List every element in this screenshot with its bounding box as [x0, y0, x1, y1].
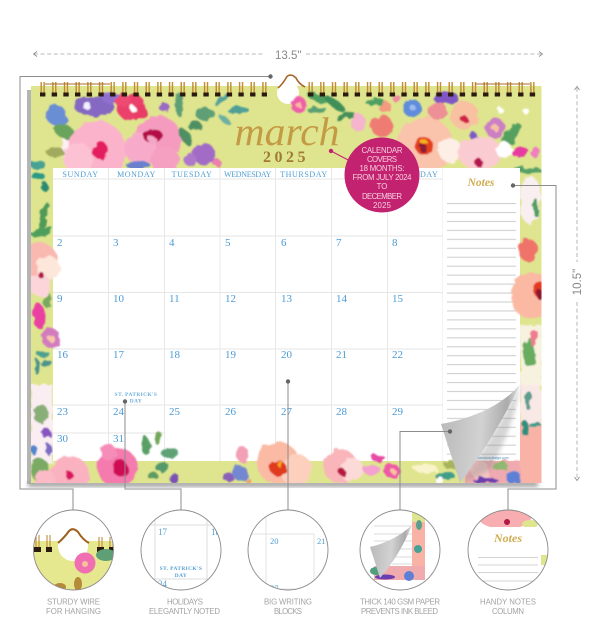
caption: holidays: ELEGANTLY NOTED: [149, 607, 220, 616]
small pink flower by hanger: [291, 97, 307, 113]
day numbers: 24: [113, 406, 124, 418]
height dimension: 10.5 inches: [572, 86, 584, 480]
caption: sturdy wire: FOR HANGING: [46, 607, 101, 616]
caption: writing blocks: [264, 598, 312, 616]
grid: white writing area: [53, 168, 443, 461]
day numbers: 6: [281, 237, 287, 249]
day numbers: 21: [336, 349, 347, 361]
spiral binding right: [308, 82, 537, 97]
spiral binding left: [40, 82, 267, 97]
caption: sturdy wire: STURDY WIRE: [47, 598, 100, 606]
detail circle: writing blocks: [248, 510, 328, 593]
day numbers: 3: [113, 237, 119, 249]
calendar page: [18, 86, 556, 494]
width dimension: 13.5 inches: 13.5": [275, 50, 301, 62]
detail circle: sturdy wire: [33, 510, 116, 591]
width dimension: 13.5 inches: [34, 50, 542, 62]
day numbers: 19: [225, 349, 236, 361]
callout: 18 months coverage: FROM JULY 2024: [352, 173, 412, 182]
day numbers: 25: [169, 406, 180, 418]
caption: holidays: HOLIDAYS: [167, 598, 203, 606]
detail circle: writing blocks: 20: [270, 536, 278, 546]
top-left florals: [30, 92, 249, 191]
grid lines: [53, 168, 443, 461]
day numbers: 30: [57, 433, 68, 445]
notes column: calendarsdesign.com: [475, 456, 509, 460]
page background: [31, 86, 542, 483]
left strip flowers overlapping grid: [31, 242, 62, 349]
calendar outline bracket: [20, 76, 270, 510]
day numbers: 29: [392, 406, 404, 418]
leader: paper: [400, 429, 452, 510]
detail circle: holidays: DAY: [175, 573, 187, 579]
callout: 18 months coverage: [329, 138, 420, 212]
caption: holidays: [149, 598, 220, 616]
hook dot: [268, 74, 273, 79]
weekday headers: MONDAY: [117, 170, 156, 179]
weekday headers: TUESDAY: [172, 170, 212, 179]
height dimension: 10.5 inches: 10.5": [572, 269, 584, 295]
right strip florals: [519, 176, 542, 436]
left strip lower florals: [30, 201, 54, 482]
holiday note: ST. PATRICK'S: [115, 392, 157, 398]
day numbers: 9: [57, 293, 63, 305]
day numbers: 26: [225, 406, 236, 418]
notes column: Notes: [467, 177, 495, 189]
caption: notes column: HANDY NOTES: [480, 598, 536, 606]
callout: 18 months coverage: TO: [377, 182, 387, 191]
caption: thick paper: [360, 598, 440, 616]
day numbers: 18: [169, 349, 180, 361]
day numbers: 8: [392, 237, 398, 249]
detail circle: holidays: ST. PATRICK'S: [160, 566, 202, 572]
caption: notes column: [480, 598, 536, 616]
month title: march: [234, 109, 340, 154]
day numbers: 28: [336, 406, 348, 418]
caption: thick paper: THICK 140 GSM PAPER: [360, 598, 440, 606]
bottom florals: [34, 430, 456, 483]
day numbers: 20: [281, 349, 292, 361]
weekday headers: SATURDAY: [392, 170, 438, 179]
day numbers: 12: [225, 293, 236, 305]
caption: writing blocks: BIG WRITING: [264, 598, 312, 606]
caption: thick paper: PREVENTS INK BLEED: [361, 607, 438, 616]
salmon corner background: [465, 420, 542, 483]
detail circle: writing blocks: 27: [270, 583, 278, 593]
detail circle: holidays: 18: [211, 527, 220, 537]
day numbers: 2: [57, 237, 62, 249]
detail circle: notes column: Notes: [493, 531, 522, 545]
day numbers: 5: [225, 237, 231, 249]
day numbers: 10: [113, 293, 124, 305]
leader: holidays: [123, 399, 181, 510]
callout: 18 months coverage: DECEMBER: [362, 192, 402, 201]
right top florals: [305, 90, 542, 173]
month title: 2025: [263, 149, 309, 166]
detail circle: thick paper: [360, 510, 440, 590]
weekday headers: WEDNESDAY: [224, 170, 272, 179]
day numbers: 27: [281, 406, 292, 418]
hanging notch and wire: [277, 75, 305, 104]
day numbers: 4: [169, 237, 175, 249]
calendar shadow: [27, 90, 538, 487]
day numbers: 11: [169, 293, 180, 305]
page curl: [441, 385, 520, 483]
notes column: [443, 168, 520, 461]
weekday headers: [62, 172, 438, 177]
detail circle: holidays: [141, 510, 221, 590]
caption: sturdy wire: [46, 598, 101, 616]
day numbers: 14: [336, 293, 348, 305]
detail circle: holidays: 17: [158, 527, 168, 537]
day numbers: 13: [281, 293, 292, 305]
bottom-right corner art: [465, 461, 520, 484]
day numbers: 15: [392, 293, 404, 305]
day numbers: [57, 237, 404, 445]
detail circle: holidays: 24: [158, 579, 168, 589]
day numbers: 22: [392, 349, 403, 361]
detail circle: writing blocks: 21: [317, 536, 326, 546]
binding wire strands: [45, 83, 530, 85]
caption: writing blocks: BLOCKS: [274, 607, 302, 616]
day numbers: 31: [113, 433, 124, 445]
day numbers: 7: [336, 237, 342, 249]
callout: 18 months coverage: CALENDAR: [362, 146, 403, 155]
peach rose overlapping notes: [510, 236, 542, 319]
leader: writing blocks: [286, 379, 290, 510]
detail circle: notes column: [468, 507, 549, 592]
weekday headers: THURSDAY: [280, 170, 328, 179]
caption: notes column: COLUMN: [492, 607, 524, 616]
holiday note: DAY: [130, 398, 142, 404]
day numbers: 16: [57, 349, 68, 361]
leader: notes column: [508, 183, 556, 510]
weekday headers: SUNDAY: [62, 170, 99, 179]
callout: 18 months coverage: 2025: [373, 201, 392, 210]
day numbers: 23: [57, 406, 68, 418]
day numbers: 17: [113, 349, 124, 361]
callout: 18 months coverage: COVERS: [367, 155, 397, 164]
callout: 18 months coverage: 18 MONTHS:: [360, 164, 404, 173]
